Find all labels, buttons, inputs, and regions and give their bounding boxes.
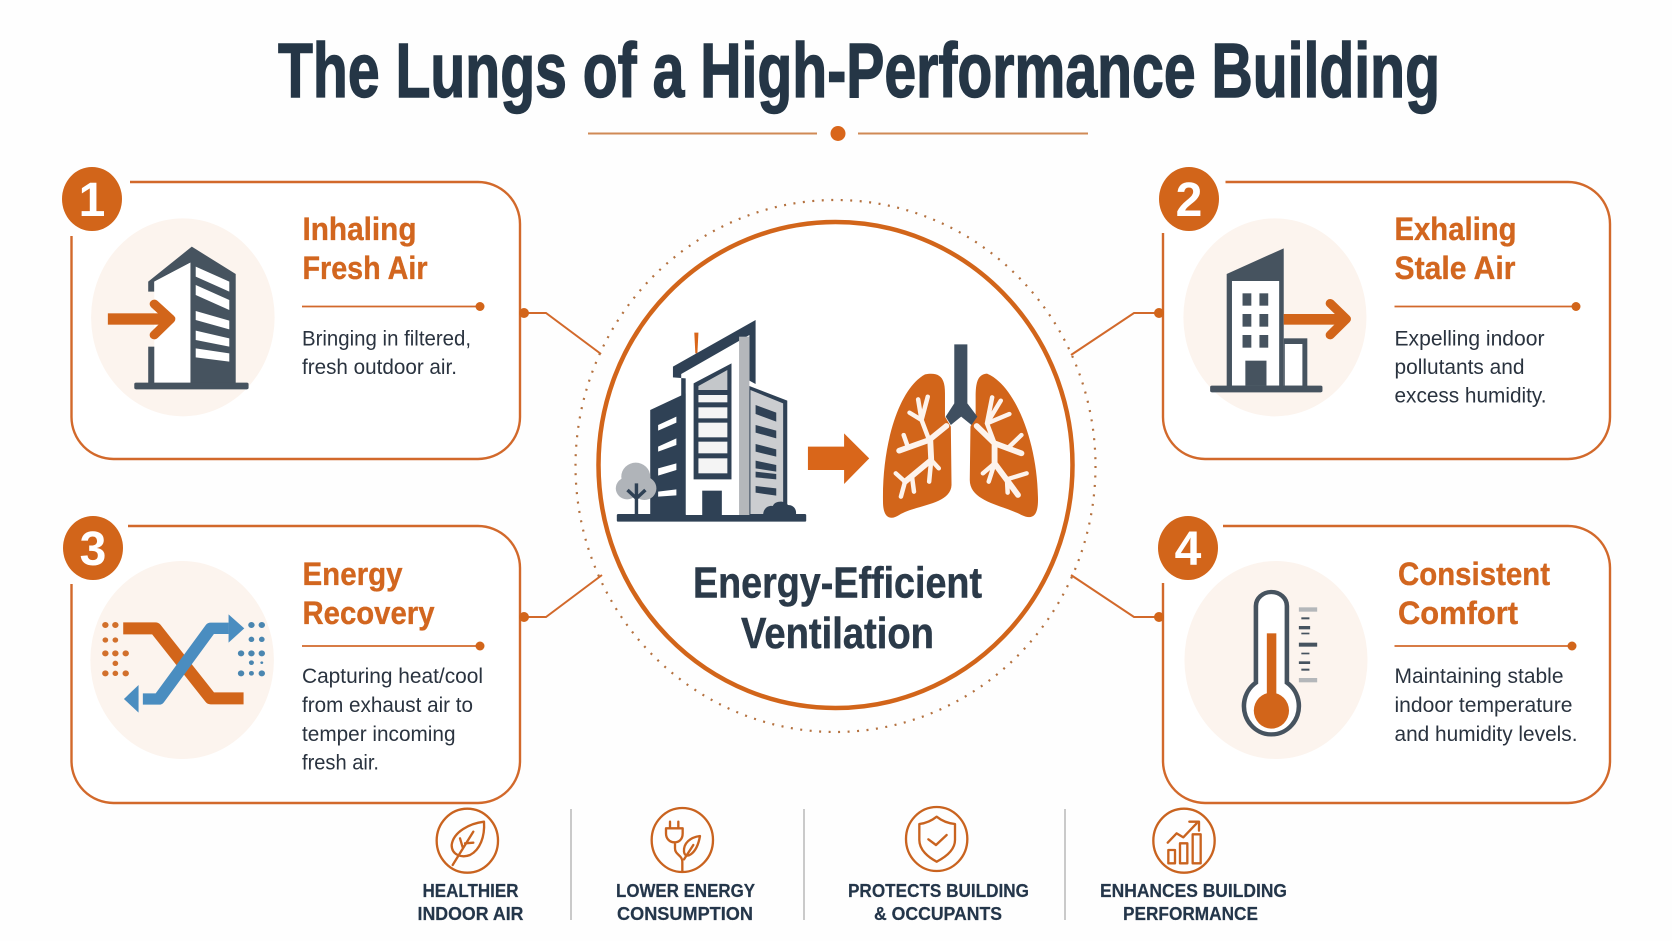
benefit: lower energy consumption: CONSUMPTION [617, 904, 753, 924]
centre label [693, 558, 982, 658]
badge 2: 2 [1176, 174, 1202, 227]
connector dot [519, 308, 529, 318]
badge 3: 3 [80, 523, 106, 576]
benefit: healthier indoor air: HEALTHIER [422, 881, 518, 901]
heading [302, 556, 435, 631]
icon: building [616, 320, 806, 522]
description: and humidity levels. [1394, 722, 1578, 746]
benefit: enhances building performance: PERFORMANCE [1123, 904, 1258, 924]
description: excess humidity. [1394, 384, 1546, 408]
icon: building with outward arrow [1183, 218, 1366, 416]
benefit: protects building and occupants [848, 807, 1029, 924]
connector dot [519, 612, 529, 622]
connector dot [1154, 612, 1164, 622]
main ring [598, 222, 1072, 708]
benefit: enhances building performance: ENHANCES BUILDING [1100, 881, 1287, 901]
panel: central hub [576, 200, 1096, 732]
heading: Inhaling [302, 211, 416, 247]
badge 4: 4 [1175, 523, 1202, 576]
rule [302, 642, 484, 650]
description [302, 326, 471, 379]
benefit: protects building and occupants: PROTECTS BUILDING [848, 881, 1029, 901]
icon: thermometer [1184, 561, 1368, 759]
heading [302, 211, 428, 286]
icon: building with inward arrow [91, 218, 275, 416]
heading: Fresh Air [302, 250, 428, 286]
connector lines from cards to centre [524, 313, 1159, 617]
heading [1398, 556, 1550, 631]
panel: energy recovery [63, 516, 529, 803]
rule [302, 302, 484, 311]
badge 1 [62, 167, 122, 231]
description [1394, 326, 1546, 408]
description: temper incoming [302, 722, 456, 746]
description [1394, 664, 1578, 746]
rule [1394, 642, 1576, 650]
rule [1394, 302, 1580, 311]
icon: lungs [883, 344, 1038, 518]
dotted outer ring [576, 200, 1096, 732]
description: fresh air. [302, 750, 379, 774]
description: Bringing in filtered, [302, 326, 471, 350]
description: Maintaining stable [1394, 664, 1564, 688]
description [302, 664, 483, 774]
description: fresh outdoor air. [302, 355, 457, 379]
connector dot [1154, 308, 1164, 318]
badge 1: 1 [79, 174, 105, 227]
description: Expelling indoor [1394, 326, 1544, 350]
badge 2 [1159, 167, 1219, 231]
description: indoor temperature [1394, 693, 1572, 717]
benefit: healthier indoor air: INDOOR AIR [418, 904, 524, 924]
title divider [588, 126, 1088, 141]
heading: Energy [302, 556, 403, 592]
badge 4 [1158, 516, 1218, 580]
description: Capturing heat/cool [302, 664, 483, 688]
benefit: protects building and occupants: & OCCUPANTS [874, 904, 1002, 924]
benefit: healthier indoor air [418, 809, 524, 924]
benefit: lower energy consumption: LOWER ENERGY [616, 881, 755, 901]
panel: inhaling fresh air [62, 167, 529, 459]
description: from exhaust air to [302, 693, 473, 717]
centre label: Energy-Efficient [693, 558, 982, 608]
benefits strip [418, 807, 1287, 924]
centre label: Ventilation [741, 609, 934, 658]
heading: Exhaling [1394, 211, 1516, 247]
heading: Consistent [1398, 556, 1550, 592]
heading: Recovery [302, 595, 435, 631]
heading [1394, 211, 1516, 286]
benefit: enhances building performance [1100, 809, 1287, 924]
icon: crossing air streams [90, 561, 274, 759]
heading: Stale Air [1394, 250, 1516, 286]
panel: exhaling stale air [1154, 167, 1610, 459]
heading: Comfort [1398, 595, 1518, 631]
badge 3 [63, 516, 123, 580]
description: pollutants and [1394, 355, 1524, 379]
benefit: lower energy consumption [616, 808, 755, 924]
arrow [808, 433, 869, 484]
panel: consistent comfort [1154, 516, 1610, 803]
